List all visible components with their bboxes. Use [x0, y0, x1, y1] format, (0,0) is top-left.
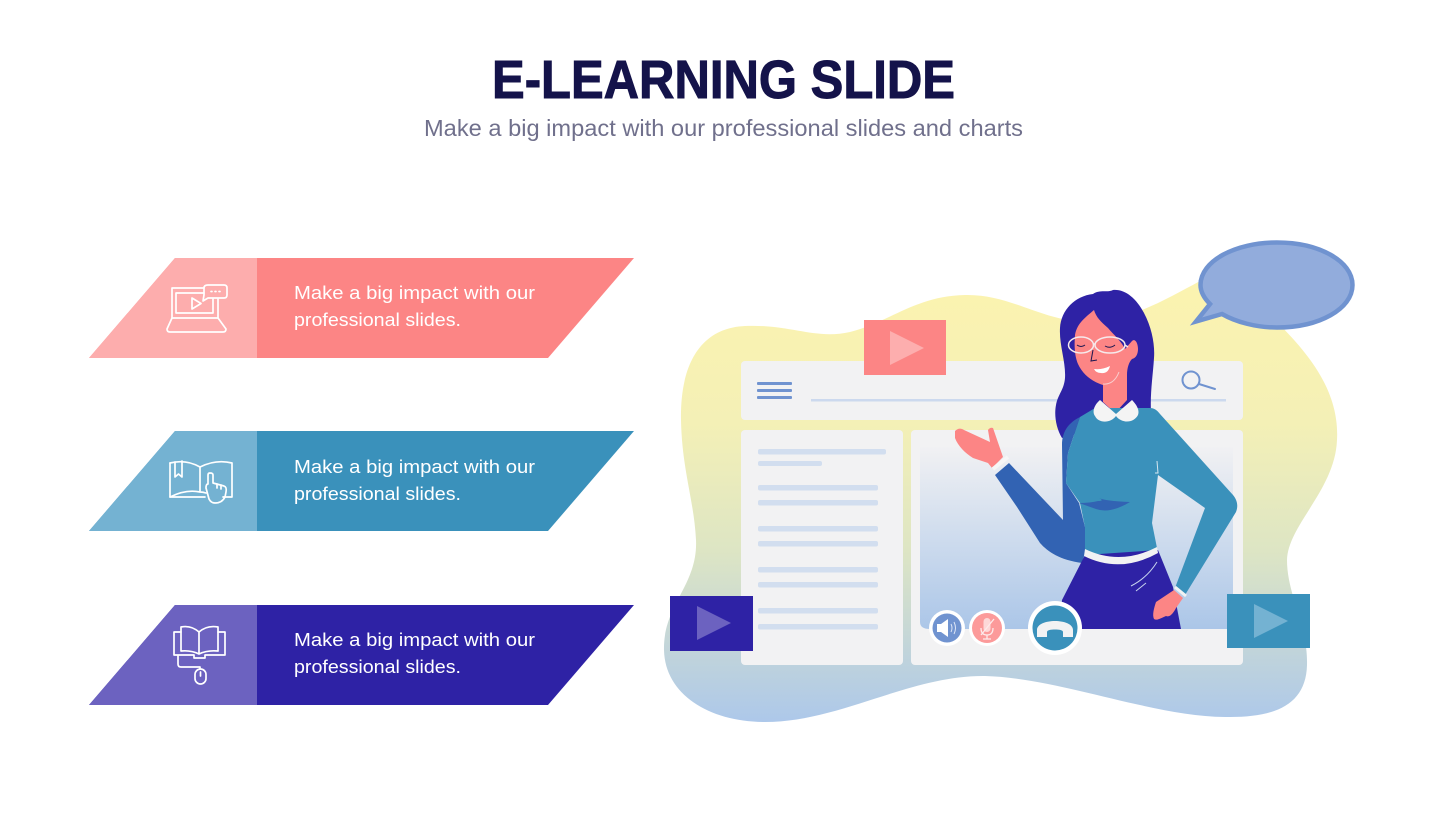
menu icon — [757, 382, 792, 399]
facial features — [1077, 345, 1115, 361]
panel: laptop video banner — [89, 258, 634, 358]
icon: book with mouse — [174, 627, 225, 684]
address line — [811, 399, 1226, 402]
sleeve crease — [1155, 461, 1158, 473]
face and neck — [1075, 310, 1138, 413]
browser header bar — [741, 361, 1243, 420]
glasses — [1068, 337, 1128, 353]
button: speaker — [929, 610, 965, 646]
speech bubble — [1196, 242, 1352, 328]
icon: search — [1182, 372, 1215, 389]
video tile: pink — [864, 320, 946, 375]
jaw line — [1103, 372, 1119, 384]
right hand — [1153, 590, 1183, 620]
panel: book banner — [89, 431, 634, 531]
panel: book and mouse banner — [89, 605, 634, 705]
skirt — [1060, 550, 1181, 629]
subtitle: Make a big impact with our professional slides and charts — [424, 115, 1023, 141]
sweater fold — [1079, 498, 1130, 510]
left hand — [955, 428, 1003, 468]
hair — [1055, 290, 1154, 438]
text: first banner: professional slides. — [294, 309, 461, 330]
woman — [955, 290, 1237, 629]
waist band — [1084, 547, 1158, 564]
video panel — [911, 430, 1243, 665]
icon: book with pointing hand — [170, 461, 232, 503]
text: second banner: Make a big impact with our — [294, 456, 535, 477]
illustration: online lesson — [664, 242, 1352, 722]
background blob — [664, 281, 1337, 722]
button: muted microphone — [969, 610, 1005, 646]
text: third banner: Make a big impact with our — [294, 629, 535, 650]
text: first banner: Make a big impact with our — [294, 282, 535, 303]
text: third banner: professional slides. — [294, 656, 461, 677]
left cuff — [993, 457, 1008, 469]
button: hang up phone — [1028, 601, 1082, 655]
text: second banner: professional slides. — [294, 483, 461, 504]
skirt creases — [1131, 562, 1157, 591]
title: E-LEARNING SLIDE — [492, 50, 955, 110]
video tile: indigo — [670, 596, 753, 651]
cuff — [1175, 587, 1186, 596]
icon: laptop with video — [167, 285, 227, 332]
left sleeve — [995, 417, 1085, 563]
sweater — [1066, 408, 1237, 595]
video tile: teal — [1227, 594, 1310, 648]
left text panel — [741, 430, 903, 665]
collar — [1094, 400, 1139, 422]
smile — [1094, 366, 1110, 373]
